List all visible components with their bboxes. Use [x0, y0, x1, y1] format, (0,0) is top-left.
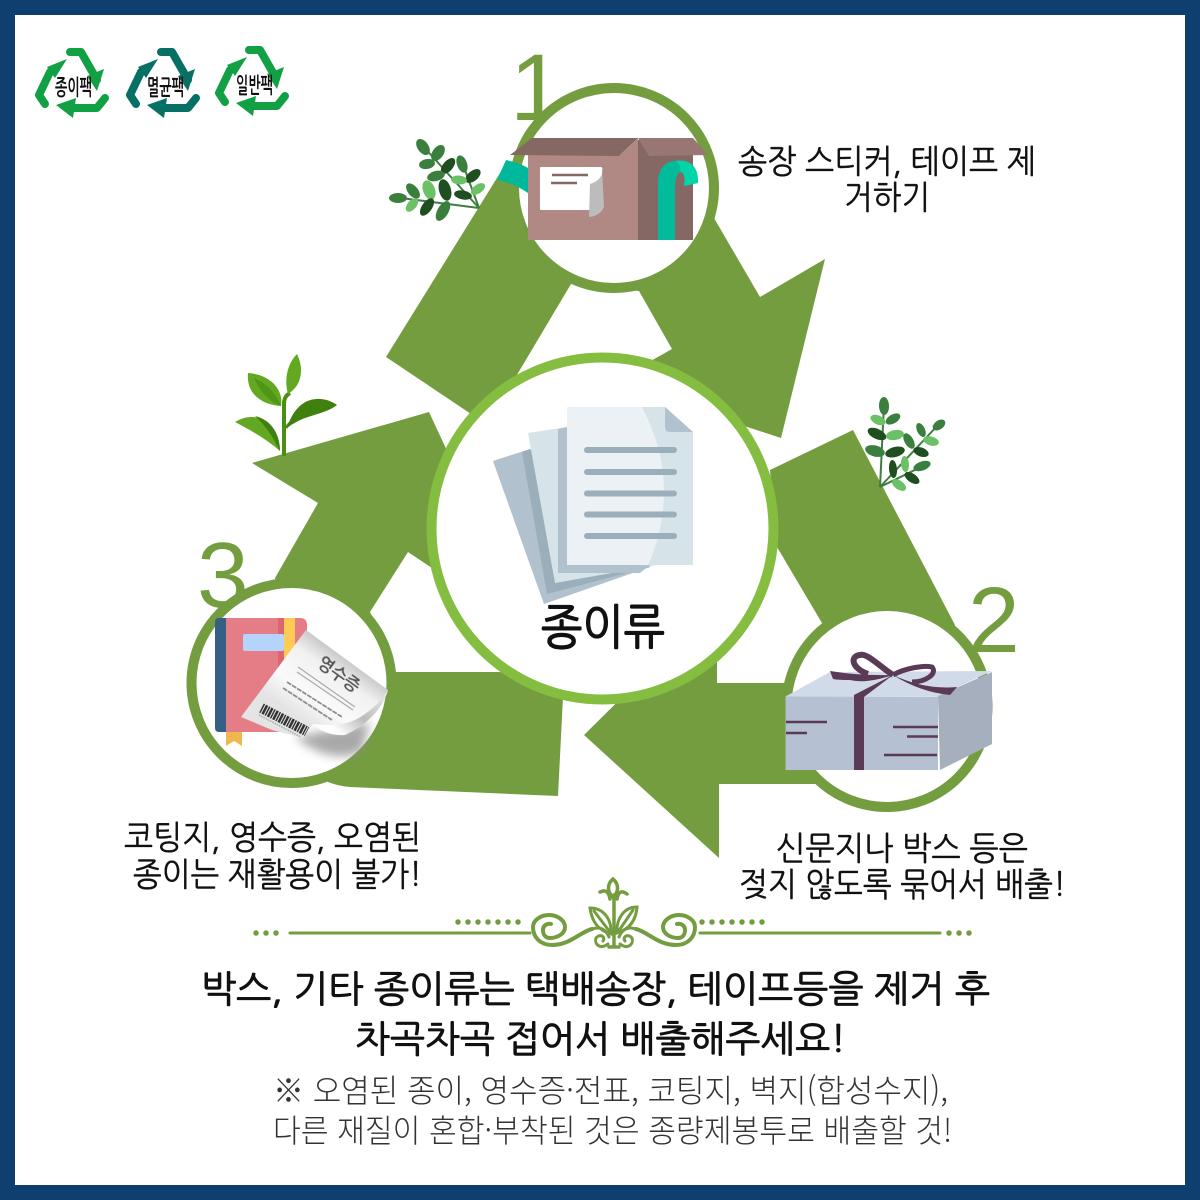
recycling logos [39, 50, 285, 118]
plant: left sprout [235, 354, 337, 456]
recycling arrow: left [252, 412, 563, 796]
logo: paper pack [39, 52, 105, 118]
step 3 circle [192, 583, 392, 783]
step 2 caption: 젖지 않도록 묶어서 배출! [739, 868, 1066, 901]
icon: wrapped bundle [786, 655, 992, 770]
footnote: 다른 재질이 혼합·부착된 것은 종량제봉투로 배출할 것! [273, 1106, 952, 1152]
center label: 종이류 [541, 603, 665, 651]
logo: sterile pack: 멸균팩 [147, 76, 184, 99]
book [215, 618, 307, 746]
step 1 caption [738, 145, 1036, 214]
step 1 caption: 거하기 [844, 181, 930, 214]
logo: general pack: 일반팩 [236, 74, 273, 97]
main message: 박스, 기타 종이류는 택배송장, 테이프등을 제거 후 [201, 971, 990, 1008]
step 1 circle [514, 88, 714, 288]
number 2: 2 [968, 568, 1020, 672]
footnote [273, 1066, 952, 1152]
logo: sterile pack [130, 52, 196, 118]
plant: top left sprig [389, 136, 487, 223]
receipt [241, 630, 388, 738]
icon: paper stack [493, 407, 693, 604]
main message: 차곡차곡 접어서 배출해주세요! [355, 1021, 846, 1058]
main message [201, 971, 990, 1058]
step 3 caption: 종이는 재활용이 불가! [133, 858, 422, 891]
step 3 caption: 코팅지, 영수증, 오염된 [124, 821, 421, 854]
floral divider [256, 879, 974, 947]
center circle [432, 358, 774, 700]
number 1: 1 [510, 35, 563, 141]
logo: general pack [219, 50, 285, 116]
step 2 circle [786, 606, 988, 807]
plant: right sprig [864, 397, 947, 493]
number 3: 3 [197, 523, 249, 627]
step 3 caption [124, 821, 422, 891]
step 1 caption: 송장 스티커, 테이프 제 [738, 145, 1036, 178]
receipt: 영수증 [314, 653, 364, 696]
recycling arrow: top [386, 165, 825, 438]
icon: cardboard box [497, 138, 708, 240]
footnote: ※ 오염된 종이, 영수증·전표, 코팅지, 벽지(합성수지), [273, 1066, 948, 1112]
logo: paper pack: 종이팩 [55, 76, 92, 99]
recycling arrow: right [584, 430, 955, 858]
step 2 caption [739, 832, 1066, 901]
icon: book and receipt [215, 618, 388, 756]
step 2 caption: 신문지나 박스 등은 [776, 832, 1028, 865]
